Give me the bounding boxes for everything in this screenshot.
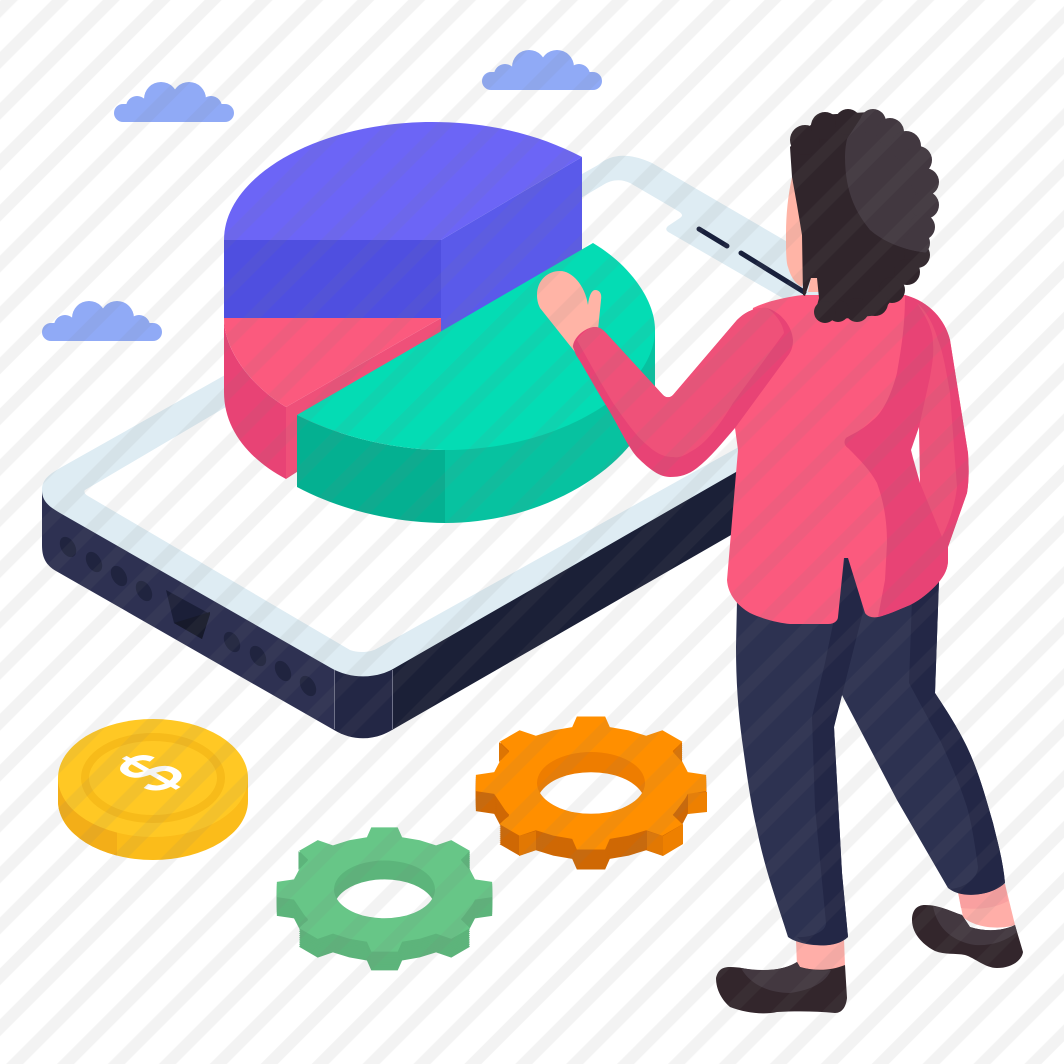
orange gear	[476, 717, 707, 869]
blue slice front	[224, 240, 441, 318]
shirt body	[727, 295, 969, 624]
blue slice side	[441, 157, 582, 335]
face	[786, 177, 812, 287]
dollar sign: $	[97, 742, 204, 804]
gear body depth	[476, 719, 706, 869]
left shoe highlight	[741, 962, 831, 993]
hair highlight	[845, 109, 939, 252]
person	[537, 109, 1023, 1013]
coin	[58, 719, 248, 860]
left shoe	[716, 962, 847, 1013]
trousers shade right leg	[909, 580, 1005, 895]
cloud middle left	[42, 301, 162, 341]
phone left side	[42, 490, 334, 730]
phone corner seams	[334, 670, 392, 729]
speaker slot short	[699, 229, 727, 246]
phone	[42, 156, 870, 738]
arm highlight	[577, 308, 784, 457]
speaker slot long	[741, 253, 804, 292]
cloud top left	[114, 82, 234, 122]
phone bezel	[42, 156, 870, 676]
arm shade	[573, 308, 793, 477]
trousers shade left leg	[797, 552, 863, 945]
right ankle	[958, 884, 1015, 928]
coin ring	[85, 737, 221, 819]
green gear	[277, 827, 492, 970]
neck	[808, 276, 820, 292]
hand	[537, 271, 601, 352]
hair dark	[790, 109, 930, 323]
coin face	[58, 719, 248, 837]
gear body depth	[277, 829, 492, 970]
right sleeve	[917, 303, 957, 537]
left ankle	[796, 938, 845, 971]
green slice side left	[297, 415, 445, 523]
phone right side	[392, 460, 745, 730]
cloud top centre	[482, 50, 602, 90]
gear tooth facets	[519, 792, 707, 856]
red slice side right	[286, 318, 441, 479]
green slice top	[297, 243, 655, 450]
phone ports right	[220, 629, 320, 699]
trousers	[736, 552, 1005, 945]
arm gap	[911, 427, 920, 483]
gear hole wall	[537, 752, 645, 814]
right ankle shadow	[958, 884, 1008, 909]
phone connector	[166, 590, 210, 639]
gear top face	[277, 827, 492, 952]
phone screen	[84, 180, 850, 652]
red slice side left	[224, 318, 286, 479]
shirt side shade	[845, 295, 969, 617]
coin edge	[58, 778, 248, 860]
gear hole opening	[337, 879, 432, 918]
gear top face	[476, 717, 706, 849]
phone corner side	[334, 660, 392, 738]
right shoe highlight	[933, 906, 1017, 945]
coin edge shade	[58, 782, 117, 856]
pie chart	[224, 122, 655, 523]
blue slice top	[224, 122, 582, 240]
gear tooth shadows	[295, 851, 475, 927]
gear hole wall	[334, 861, 435, 918]
phone ports left	[56, 534, 156, 604]
green slice side right	[445, 330, 655, 523]
red slice top	[224, 318, 441, 407]
right shoe	[912, 905, 1023, 968]
gear hole opening	[540, 772, 642, 814]
gear tooth shadows	[495, 742, 688, 823]
